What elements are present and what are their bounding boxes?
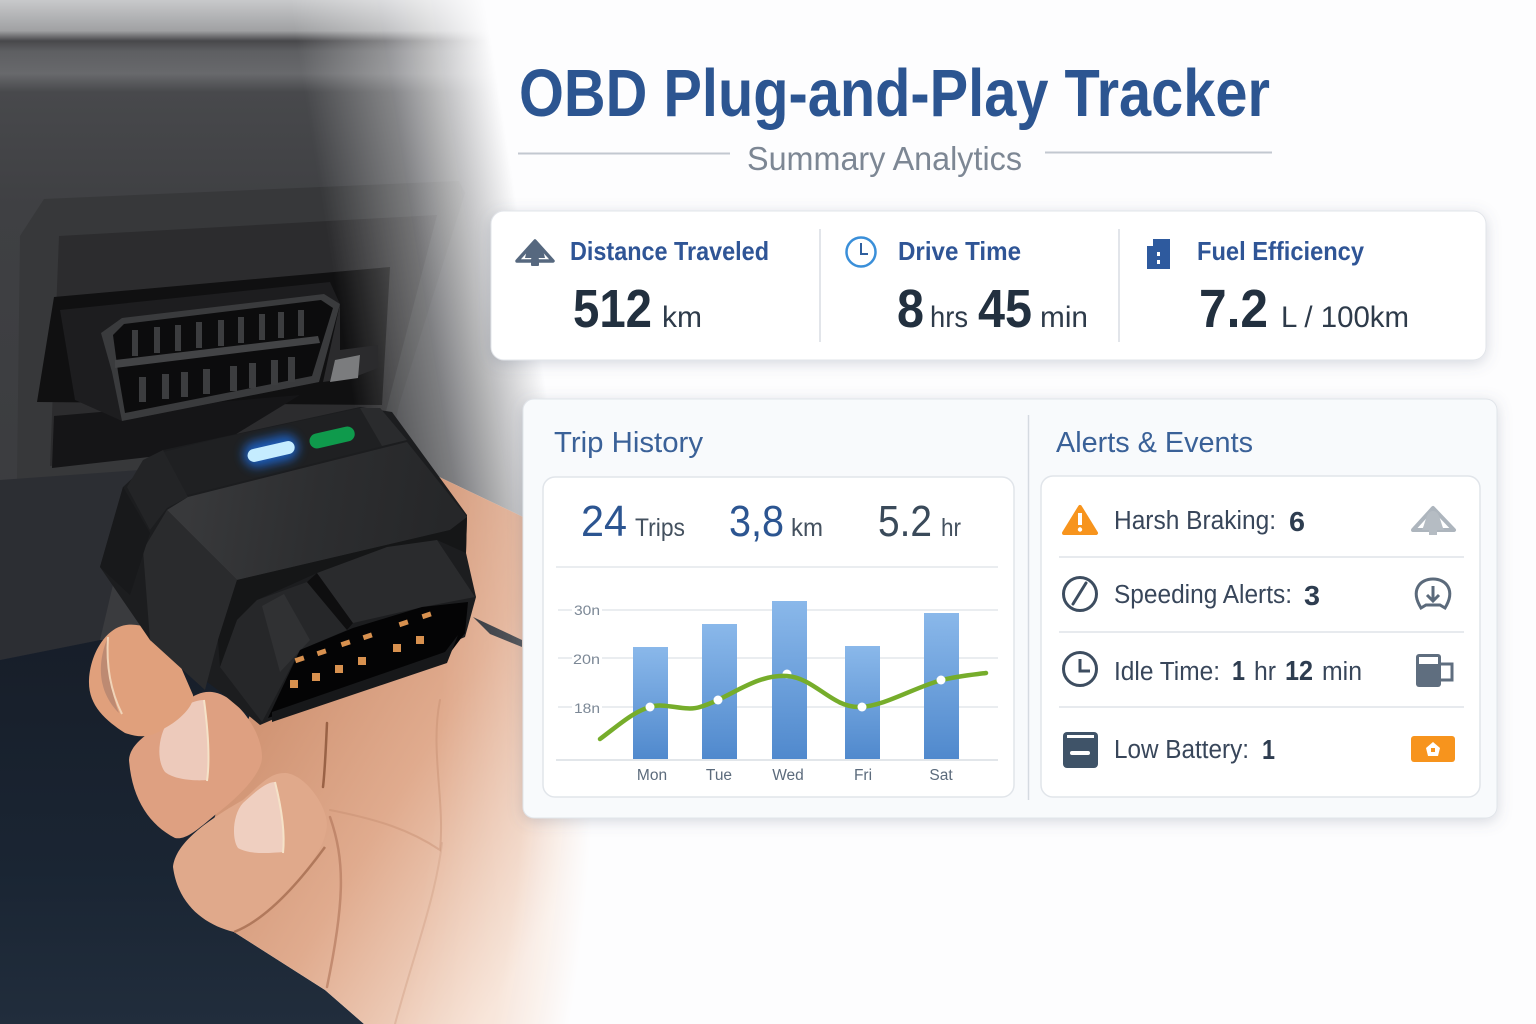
row: speeding alerts: 3 (1304, 580, 1320, 611)
socket (268, 602, 468, 718)
middle finger (89, 625, 193, 736)
index nail (159, 700, 208, 780)
row: harsh braking: Harsh Braking: (1114, 507, 1276, 535)
vehicle OBD port (60, 282, 378, 421)
pins (290, 612, 432, 688)
panel: trip history card (543, 477, 1014, 797)
top plate (163, 408, 407, 495)
row: idle time: hr (1254, 658, 1276, 686)
icon: fuel (1147, 239, 1170, 269)
thumb nail (234, 782, 284, 853)
row: harsh braking (1064, 506, 1454, 537)
icon: download gauge (1416, 579, 1450, 608)
panel: trip history and alerts (523, 399, 1497, 818)
icon: clock (1064, 652, 1096, 686)
heading: alerts and events: Alerts & Events (1056, 427, 1253, 459)
bar and line chart: 30n (574, 602, 600, 618)
row: low battery: 1 (1262, 734, 1275, 765)
dark lower background (0, 640, 420, 1024)
white underlay below the fading hand (200, 475, 680, 1024)
row: idle time: 1 (1232, 655, 1245, 686)
day labels: Sat (929, 767, 953, 784)
metric: distance traveled: 512 (573, 279, 652, 339)
row: low battery (1063, 732, 1455, 768)
row: idle time: min (1322, 658, 1362, 686)
trip stats (581, 497, 961, 546)
title: OBD Plug-and-Play Tracker (519, 56, 1270, 131)
metric: drive time: 45 (978, 279, 1032, 339)
metric: fuel efficiency: L / 100km (1281, 301, 1409, 334)
nose (220, 582, 347, 722)
icon: battery (1063, 732, 1098, 768)
icon: grey alert (1413, 508, 1454, 535)
trip stats: hr (941, 514, 961, 542)
index finger (129, 692, 262, 838)
panel: summary metrics (491, 211, 1486, 360)
icon: fuel gauge (1416, 654, 1452, 687)
metric: distance traveled: km (662, 301, 702, 334)
day labels: Fri (854, 767, 872, 784)
row: low battery: Low Battery: (1114, 736, 1249, 764)
icon: warning (1064, 507, 1096, 533)
bars (633, 601, 959, 759)
row: idle time (1064, 652, 1452, 687)
bar and line chart (556, 567, 998, 784)
bar and line chart: 18n (574, 700, 600, 716)
trip stats: 5.2 (878, 497, 932, 546)
metric: drive time: 8 (897, 279, 924, 339)
photo: OBD tracker held in hand at the car port (0, 0, 578, 1024)
metric: fuel efficiency: 7.2 (1199, 279, 1268, 339)
bar and line chart: 20n (573, 651, 600, 667)
metric: drive time: min (1040, 301, 1088, 334)
icon: gauge (1064, 578, 1096, 610)
heading: trip history: Trip History (554, 427, 704, 459)
day labels: Tue (706, 767, 732, 784)
day labels (637, 767, 953, 784)
metric: fuel efficiency: Fuel Efficiency (1197, 236, 1364, 266)
row: idle time: 12 (1285, 655, 1313, 686)
row: harsh braking: 6 (1289, 506, 1305, 537)
metric: distance traveled: Distance Traveled (570, 236, 769, 266)
row: idle time: Idle Time: (1114, 658, 1220, 686)
row: speeding alerts (1064, 578, 1450, 611)
tracker device (100, 407, 476, 725)
icon: distance (517, 241, 553, 266)
icon: orange battery badge (1411, 736, 1455, 762)
hand (88, 477, 578, 1024)
metric: drive time: hrs (930, 301, 968, 334)
metric: drive time (846, 236, 1088, 339)
trend line (600, 673, 986, 739)
trip stats: Trips (635, 514, 685, 542)
day labels: Wed (772, 767, 804, 784)
metric: fuel efficiency (1147, 236, 1409, 339)
trip stats: 24 (581, 497, 627, 546)
subtitle: Summary Analytics (747, 140, 1022, 177)
metric: drive time: Drive Time (898, 236, 1021, 266)
metric: distance traveled (517, 236, 769, 339)
dashboard (0, 0, 540, 660)
trip stats: 3,8 (729, 497, 784, 546)
palm (214, 477, 578, 1024)
row: speeding alerts: Speeding Alerts: (1114, 581, 1292, 609)
trip stats: km (791, 514, 823, 542)
icon: clock (846, 238, 876, 266)
LED indicators (241, 432, 301, 470)
thumb (173, 773, 327, 932)
day labels: Mon (637, 767, 667, 784)
panel: alerts card (1041, 476, 1480, 797)
